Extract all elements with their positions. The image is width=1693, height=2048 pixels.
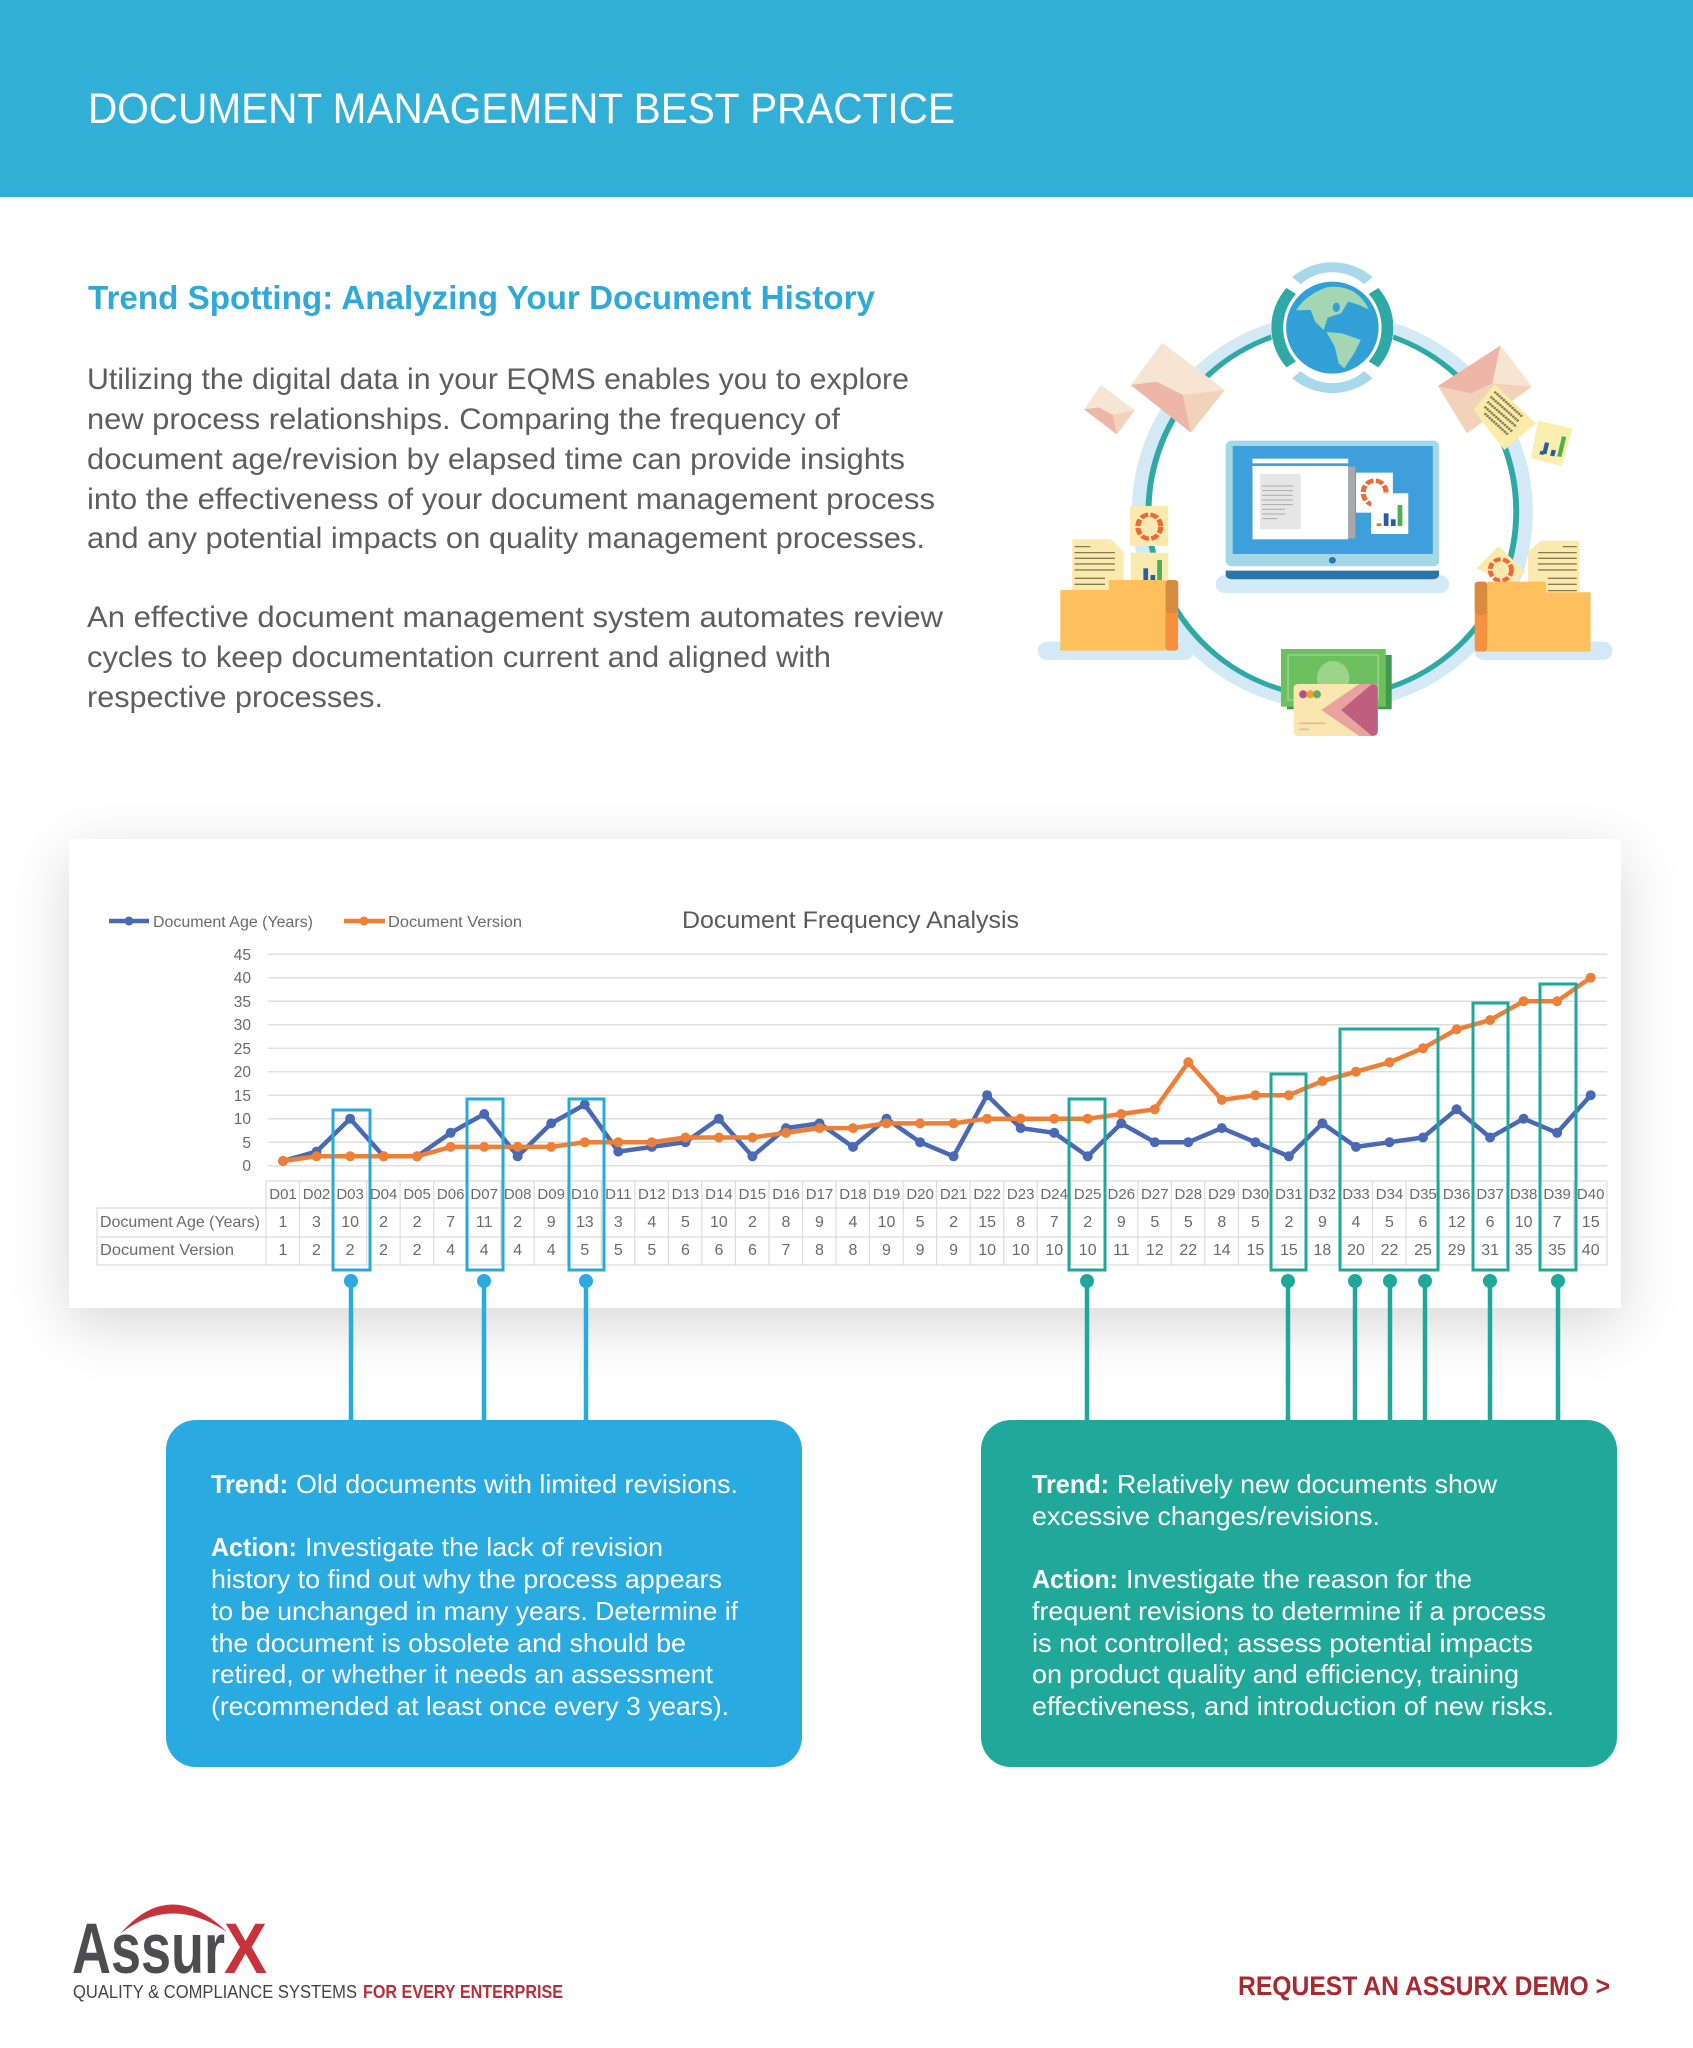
table header row: D26: [1108, 1186, 1135, 1203]
table row: document age: 4: [647, 1214, 656, 1231]
y axis labels: 25: [234, 1041, 251, 1058]
y axis labels: 5: [242, 1135, 251, 1152]
connectors: new documents: [1080, 1274, 1565, 1422]
y axis labels: 0: [242, 1158, 251, 1175]
table row: document age: 2: [1284, 1214, 1293, 1231]
table header row: D33: [1342, 1186, 1370, 1203]
table row: document version: 2: [312, 1242, 321, 1259]
intro paragraph 1: into the effectiveness of your document management process: [87, 483, 935, 516]
table row: document age: 2: [513, 1214, 522, 1231]
table row: document age: 8: [1217, 1214, 1226, 1231]
table row: document age: 5: [1251, 1214, 1260, 1231]
table row: document age: 2: [379, 1214, 388, 1231]
table row: document age: 12: [1448, 1214, 1466, 1231]
table row: document version: 25: [1414, 1242, 1432, 1259]
icon: small envelope left: [1084, 385, 1135, 434]
table row: document version: 14: [1213, 1242, 1231, 1259]
table header row: D09: [537, 1186, 565, 1203]
y axis labels: 45: [234, 947, 251, 964]
table row: document age: 10: [341, 1214, 359, 1231]
callout text: action: [211, 1532, 739, 1721]
table row: document age: 7: [446, 1214, 455, 1231]
table row: document age: 5: [1184, 1214, 1193, 1231]
table row: document age: 2: [748, 1214, 757, 1231]
table row: document age: 2: [949, 1214, 958, 1231]
table row: document version: 18: [1314, 1242, 1331, 1259]
callout text: action: is not controlled; assess potential impacts: [1032, 1628, 1533, 1658]
table row: document age: 13: [576, 1214, 594, 1231]
icon: laptop: [1216, 441, 1449, 593]
callout text: trend: Old documents with limited revisions.: [296, 1469, 738, 1499]
table row: document version: 10: [1012, 1242, 1030, 1259]
table row: document version: Document Version: [100, 1242, 234, 1259]
table header row: D28: [1175, 1186, 1202, 1203]
table row: document version: 20: [1347, 1242, 1365, 1259]
section heading: Trend Spotting: Analyzing Your Document History: [88, 280, 875, 317]
call to action link: REQUEST AN ASSURX DEMO >: [1238, 1971, 1610, 2001]
table row: document version: 6: [748, 1242, 757, 1259]
table header row: D37: [1476, 1186, 1504, 1203]
callout text: action: the document is obsolete and should be: [211, 1628, 686, 1658]
table row: document version: 8: [849, 1242, 858, 1259]
table row: document age: 10: [1515, 1214, 1533, 1231]
table header row: D40: [1577, 1186, 1604, 1203]
callout text: action: Investigate the lack of revision: [305, 1532, 663, 1562]
callout text: trend: Trend:: [211, 1469, 288, 1499]
table row: document version: 6: [714, 1242, 723, 1259]
callout text: action: effectiveness, and introduction of new risks.: [1032, 1691, 1554, 1721]
table row: document version: 9: [916, 1242, 925, 1259]
table row: document version: 22: [1381, 1242, 1398, 1259]
intro paragraph 2: cycles to keep documentation current and aligned with: [87, 641, 831, 674]
table row: document version: 4: [513, 1242, 522, 1259]
table row: document version: 35: [1548, 1242, 1566, 1259]
table row: document version: 2: [379, 1242, 388, 1259]
table header row: D36: [1443, 1186, 1470, 1203]
highlight boxes: old documents: [333, 1099, 604, 1270]
table header row: D06: [437, 1186, 464, 1203]
panel: chart card: [69, 839, 1621, 1308]
panel: old documents callout: [166, 1420, 802, 1767]
table row: document age: 1: [279, 1214, 288, 1231]
y axis labels: 10: [234, 1111, 251, 1128]
table row: document age: 15: [1582, 1214, 1600, 1231]
table row: document version: 11: [1113, 1242, 1130, 1259]
table header row: D27: [1141, 1186, 1169, 1203]
table row: document version: 8: [815, 1242, 824, 1259]
callout text: action: retired, or whether it needs an assessment: [211, 1659, 714, 1689]
callout text: trend: [1032, 1469, 1497, 1531]
table header row: D25: [1074, 1186, 1101, 1203]
table row: document version: 6: [681, 1242, 690, 1259]
callout text: action: Action:: [1032, 1564, 1118, 1594]
table row: document age: 7: [1553, 1214, 1562, 1231]
table header row: D17: [806, 1186, 833, 1203]
table row: document version: 7: [782, 1242, 791, 1259]
table header row: D30: [1242, 1186, 1269, 1203]
table row: document version: 2: [346, 1242, 355, 1259]
callout text: action: [1032, 1564, 1554, 1721]
table row: document age: 4: [1352, 1214, 1361, 1231]
icon: base strips: [1038, 642, 1612, 660]
table header row: D23: [1007, 1186, 1034, 1203]
table row: document version: 40: [1582, 1242, 1600, 1259]
table row: document age: 5: [1150, 1214, 1159, 1231]
callout text: action: Investigate the reason for the: [1126, 1564, 1472, 1594]
line series: document version: [283, 978, 1591, 1161]
table row: document age: 2: [413, 1214, 422, 1231]
table row: document age: 10: [710, 1214, 728, 1231]
intro paragraph 2: [87, 601, 943, 714]
intro paragraph 1: [87, 363, 935, 555]
panel: new documents callout: [981, 1420, 1617, 1767]
table row: document version: 10: [1045, 1242, 1063, 1259]
y axis labels: 40: [234, 970, 251, 987]
table row: document age: 2: [1083, 1214, 1092, 1231]
table header row: D19: [873, 1186, 900, 1203]
logo: AssurX: [72, 1904, 563, 2002]
table row: document version: 10: [1079, 1242, 1097, 1259]
header banner: [0, 0, 1693, 197]
table row: document version: 9: [882, 1242, 891, 1259]
callout text: trend: Trend:: [1032, 1469, 1109, 1499]
table row: document version: 22: [1179, 1242, 1197, 1259]
table header row: D05: [403, 1186, 431, 1203]
logo wordmark: X: [224, 1910, 267, 1989]
table row: document version: 5: [614, 1242, 623, 1259]
callout text: action: frequent revisions to determine if a process: [1032, 1596, 1546, 1626]
table row: document version: 5: [647, 1242, 656, 1259]
table header row: D12: [638, 1186, 666, 1203]
icon: right folder: [1475, 541, 1591, 652]
table header row: D39: [1543, 1186, 1571, 1203]
table row: document version: 12: [1146, 1242, 1164, 1259]
intro paragraph 2: respective processes.: [87, 681, 383, 714]
table header row: D31: [1275, 1186, 1303, 1203]
y axis labels: 35: [234, 994, 251, 1011]
table row: document version: 15: [1247, 1242, 1264, 1259]
table header row: D22: [973, 1186, 1001, 1203]
table header row: D10: [571, 1186, 599, 1203]
table row: document age: 5: [681, 1214, 690, 1231]
callout text: action: history to find out why the process appears: [211, 1564, 722, 1594]
callout text: action: (recommended at least once every 3 years).: [211, 1691, 729, 1721]
table header row: D16: [772, 1186, 800, 1203]
table row: document version: 31: [1481, 1242, 1499, 1259]
y axis labels: [234, 947, 251, 1175]
table row: document age: 10: [878, 1214, 896, 1231]
table header row: D32: [1309, 1186, 1336, 1203]
logo arc: [120, 1904, 227, 1934]
table header row: D11: [605, 1186, 632, 1203]
table row: document version: 9: [949, 1242, 958, 1259]
table row: document version: 4: [547, 1242, 556, 1259]
table row: document version: 4: [480, 1242, 489, 1259]
table header row: D03: [336, 1186, 364, 1203]
table row: document age: 8: [782, 1214, 791, 1231]
callout text: action: Action:: [211, 1532, 297, 1562]
icon: money and credit card: [1281, 649, 1392, 736]
table row: document age: 6: [1419, 1214, 1428, 1231]
table header row: D34: [1376, 1186, 1403, 1203]
table row: document age: 11: [476, 1214, 493, 1231]
table row: document age: 6: [1486, 1214, 1495, 1231]
icon: left folder: [1060, 506, 1178, 651]
table header row: D08: [504, 1186, 531, 1203]
table header row: D15: [739, 1186, 766, 1203]
table row: document age: 4: [849, 1214, 858, 1231]
table row: document version: 1: [279, 1242, 288, 1259]
table header row: D07: [470, 1186, 498, 1203]
table row: document age: 9: [547, 1214, 556, 1231]
icon: globe: [1271, 266, 1394, 390]
table row: document version: 15: [1280, 1242, 1298, 1259]
table header row: D29: [1208, 1186, 1236, 1203]
icon: cycle ring: [1140, 320, 1525, 703]
table header row: D01: [269, 1186, 297, 1203]
table header row: D35: [1409, 1186, 1437, 1203]
intro paragraph 1: Utilizing the digital data in your EQMS enables you to explore: [87, 363, 909, 396]
table header row: D04: [370, 1186, 397, 1203]
callout text: trend: excessive changes/revisions.: [1032, 1501, 1380, 1531]
table row: document age: Document Age (Years): [100, 1214, 260, 1231]
illustration: document management cycle: [1038, 266, 1612, 736]
table header row: D38: [1510, 1186, 1537, 1203]
table row: document age: 3: [614, 1214, 623, 1231]
table header row: D20: [906, 1186, 934, 1203]
table header row: D14: [705, 1186, 733, 1203]
table row: document version: 4: [446, 1242, 455, 1259]
y axis labels: 15: [234, 1088, 251, 1105]
icon: envelope right with documents: [1438, 346, 1573, 466]
intro paragraph 1: and any potential impacts on quality management processes.: [87, 522, 925, 555]
table header row: D02: [303, 1186, 330, 1203]
table row: document version: 29: [1448, 1242, 1466, 1259]
intro paragraph 2: An effective document management system automates review: [87, 601, 943, 634]
table header row: D18: [839, 1186, 867, 1203]
intro paragraph 1: new process relationships. Comparing the frequency of: [87, 403, 841, 436]
table row: document age: 15: [978, 1214, 996, 1231]
table row: document version: 10: [978, 1242, 996, 1259]
callout text: action: to be unchanged in many years. Determine if: [211, 1596, 739, 1626]
callout text: trend: Relatively new documents show: [1117, 1469, 1497, 1499]
table row: document age: 7: [1050, 1214, 1059, 1231]
table row: document age: 9: [1318, 1214, 1327, 1231]
intro paragraph 1: document age/revision by elapsed time can provide insights: [87, 443, 905, 476]
connectors: old documents: [344, 1274, 593, 1422]
table row: document age: 5: [916, 1214, 925, 1231]
logo tagline: QUALITY & COMPLIANCE SYSTEMS: [73, 1982, 357, 2002]
logo wordmark: Assur: [72, 1910, 225, 1989]
y axis labels: 20: [234, 1064, 251, 1081]
legend: document age: Document Age (Years): [153, 914, 313, 931]
highlight boxes: new documents: [1069, 984, 1576, 1270]
chart title: Document Frequency Analysis: [682, 907, 1019, 934]
title: DOCUMENT MANAGEMENT BEST PRACTICE: [88, 85, 955, 133]
logo: AssurX: FOR EVERY ENTERPRISE: [363, 1982, 563, 2002]
table row: document version: 35: [1515, 1242, 1533, 1259]
table header row: D24: [1040, 1186, 1068, 1203]
table row: document age: 8: [1016, 1214, 1025, 1231]
table row: document age: 9: [1117, 1214, 1126, 1231]
table row: document version: [100, 1242, 1600, 1259]
legend: document version: Document Version: [388, 914, 522, 931]
table row: document age: 3: [312, 1214, 321, 1231]
callout text: action: on product quality and efficiency, training: [1032, 1659, 1519, 1689]
table row: document age: 5: [1385, 1214, 1394, 1231]
table row: document version: 2: [413, 1242, 422, 1259]
line series: document age: [283, 1095, 1591, 1161]
y axis labels: 30: [234, 1017, 251, 1034]
table row: document age: [100, 1214, 1600, 1231]
icon: large envelope left: [1131, 343, 1225, 433]
table header row: [269, 1186, 1604, 1203]
table row: document age: 9: [815, 1214, 824, 1231]
table row: document version: 5: [580, 1242, 589, 1259]
table header row: D13: [672, 1186, 699, 1203]
table header row: D21: [940, 1186, 967, 1203]
